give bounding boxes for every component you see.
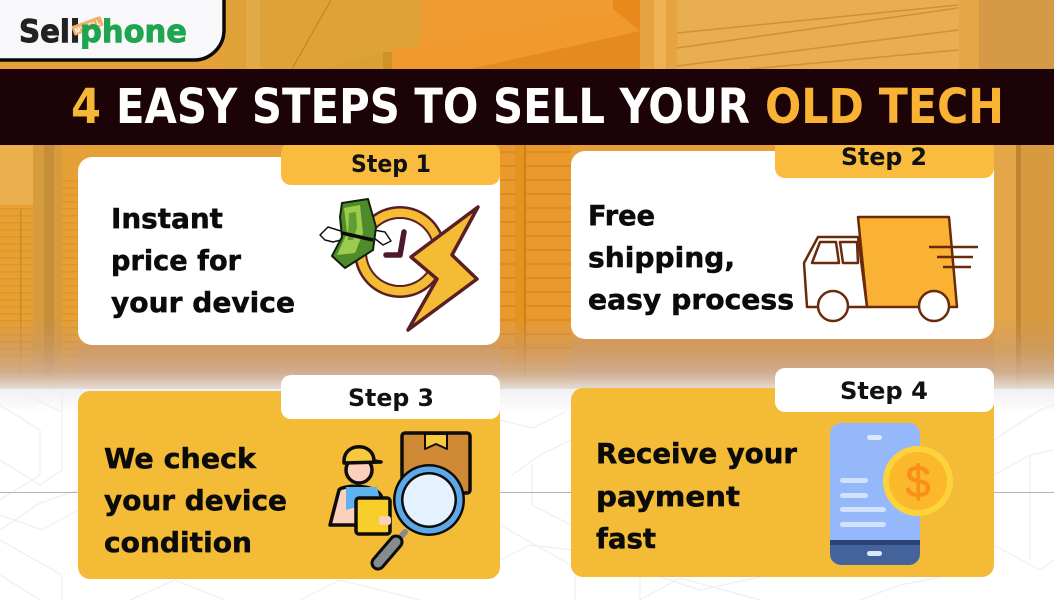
right columns [994,145,1054,392]
logo wordmark: Sell [19,14,80,50]
icon: clock, flying money and lightning bolt [320,199,478,330]
tab: step 2: Step 2 [841,143,927,171]
step 2 text: shipping, [588,241,735,274]
icon: phone with dollar coin [830,423,953,565]
tab: step 3: Step 3 [348,384,434,412]
card: step 3 [78,391,500,579]
card: step 1 [78,157,500,345]
step 3 text: condition [104,526,252,559]
logo wordmark: phone [80,14,187,50]
tab: step 2 [775,136,994,178]
step 1 text: price for [111,244,241,277]
step 3 text: We check [104,442,257,475]
tab: step 4 [775,368,994,412]
tab: step 3 [281,375,500,419]
step 4 text: Receive your [596,437,797,470]
icon: inspector with parcel and magnifier [330,433,470,563]
card: step 4 [571,388,994,577]
step 2 text: easy process [588,283,794,316]
step 2 text: Free [588,199,655,232]
left shutters [0,205,33,390]
icon: delivery truck [804,217,978,321]
horizontal grey rule [0,492,1054,494]
title banner [0,69,1054,145]
step 4 text: payment [596,480,740,513]
tab: step 4: Step 4 [840,377,928,405]
title text: 4 [71,79,101,135]
title text: OLD TECH [765,79,1004,135]
tab: step 1 [281,143,500,185]
step 1 text: Instant [111,202,223,235]
title text: EASY STEPS TO SELL YOUR [116,79,750,135]
logo wordmark [19,14,187,50]
centre shutters [500,145,571,392]
logo wordmark: MYCELL [74,19,102,35]
card: step 2 [571,151,994,339]
step 1 text: your device [111,286,295,319]
background: white hexagon pattern [0,392,1054,600]
background: storage units photo [0,0,1054,413]
icon: phone with dollar coin: $ [905,456,931,507]
tab: step 1: Step 1 [351,150,431,178]
step 4 text: fast [596,522,656,555]
step 3 text: your device [104,484,287,517]
logo panel [0,0,224,60]
